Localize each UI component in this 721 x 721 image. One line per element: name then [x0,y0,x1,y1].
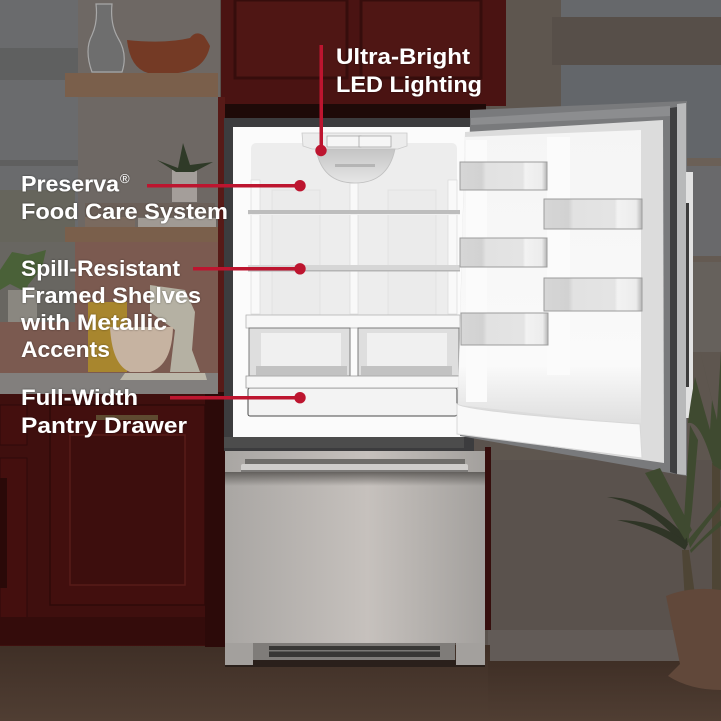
callout: Preserva Food Care System [21,171,306,224]
callout: Ultra-Bright LED Lighting: LED Lighting [336,72,482,97]
callout: Spill-Resistant Framed Shelves with Metallic Accents: Framed Shelves [21,283,201,308]
base grille [225,643,485,667]
countertop [0,373,218,394]
shelf rails [251,180,457,314]
open door frame [460,101,687,476]
upper glass shelf [248,210,460,215]
callout: Spill-Resistant Framed Shelves with Metallic Accents: with Metallic [20,310,167,335]
callout: Full-Width Pantry Drawer [21,385,306,438]
potted plant [607,343,721,690]
icon: stand mixer [110,285,207,380]
middle glass shelf [248,265,460,272]
icon: glass vase [88,4,124,72]
callout: Ultra-Bright LED Lighting [315,44,482,156]
callout: Spill-Resistant Framed Shelves with Metallic Accents [20,256,306,362]
callout: Preserva Food Care System: ® [120,171,130,186]
door handle strip [686,172,693,418]
callout: Spill-Resistant Framed Shelves with Metallic Accents: Accents [21,337,110,362]
callout: Preserva Food Care System: Preserva [21,172,119,196]
refrigerator cabinet frame [224,118,474,451]
tall cabinet edge [218,97,225,645]
left crisper drawer [249,328,350,376]
yellow box [88,302,127,372]
baseboard [488,630,721,661]
freezer door [225,451,485,643]
door liner [457,120,664,463]
shelf: wooden lower [65,227,218,242]
background: right wall and window frames [490,0,721,630]
crisper cover shelf [246,315,460,328]
shelf: wooden upper [65,73,218,97]
freezer handle [241,459,468,472]
lower cabinets [0,392,491,647]
LED light housing [302,133,407,183]
refrigerator bottom strip [224,437,464,448]
refrigerator interior [233,127,470,437]
callout: Full-Width Pantry Drawer: Full-Width [21,385,138,410]
floor [0,645,721,721]
callout: Spill-Resistant Framed Shelves with Metallic Accents: Spill-Resistant [21,256,181,281]
icon: small potted plant [157,143,213,202]
pantry drawer [246,376,462,416]
callout: Full-Width Pantry Drawer: Pantry Drawer [21,413,187,438]
door bins [460,162,642,345]
icon: terracotta bowl [127,33,210,73]
right crisper drawer [358,328,459,376]
upper cabinet [221,0,506,119]
callout: Ultra-Bright LED Lighting: Ultra-Bright [336,44,471,69]
books [85,203,216,227]
icon: left potted plant [0,250,46,322]
callout: Preserva Food Care System: Food Care System [21,199,228,224]
door bottom bin [457,404,642,458]
